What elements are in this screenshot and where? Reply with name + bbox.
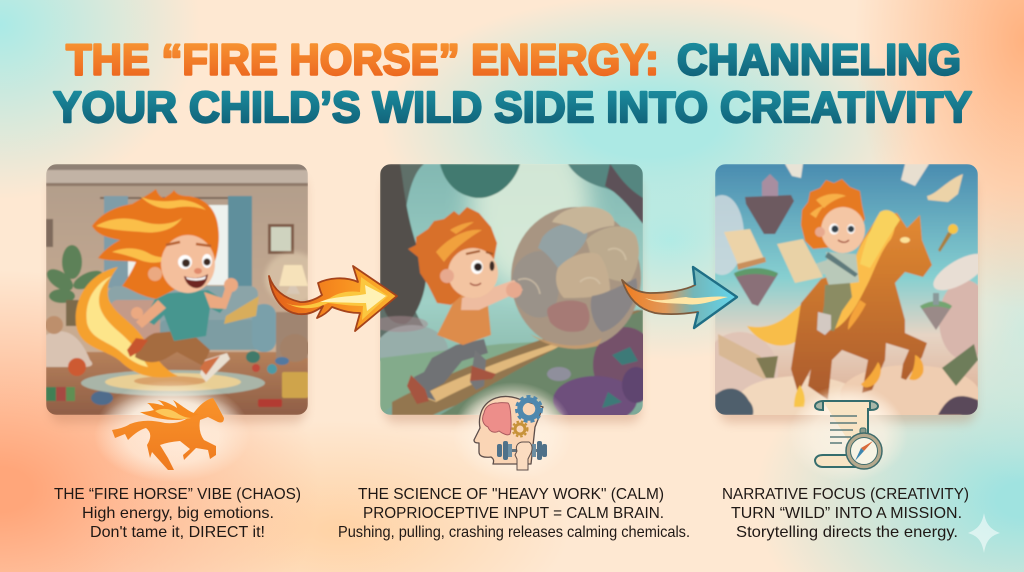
caption line: Don't tame it, DIRECT it! bbox=[90, 524, 265, 541]
caption: narrative focus bbox=[722, 486, 969, 541]
icon: galloping fire horse bbox=[112, 398, 224, 470]
rider scroll bbox=[777, 239, 823, 283]
boy arms bbox=[131, 278, 238, 328]
glow behind icons bbox=[94, 390, 908, 482]
head silhouette bbox=[474, 396, 543, 464]
toys bbox=[45, 316, 308, 407]
boy hair highlights bbox=[96, 196, 206, 263]
trees and canopy bbox=[380, 164, 643, 340]
floating islands bbox=[734, 174, 978, 386]
sky bbox=[715, 164, 978, 388]
sofa bbox=[108, 286, 310, 362]
purple rocks bbox=[546, 326, 643, 415]
icon glow on panel bbox=[101, 382, 243, 415]
lower foliage bbox=[380, 315, 533, 412]
magic spark bbox=[938, 224, 958, 252]
blue gear bbox=[516, 396, 542, 422]
clouds bbox=[715, 194, 978, 415]
panel shadows bbox=[50, 176, 976, 423]
caption line: High energy, big emotions. bbox=[82, 505, 274, 522]
rider body bbox=[816, 252, 860, 336]
panel: narrative focus creativity illustration bbox=[715, 164, 978, 415]
caption heading: THE SCIENCE OF "HEAVY WORK" (CALM) bbox=[358, 486, 664, 503]
sloped ground path bbox=[392, 310, 643, 415]
forest background bbox=[383, 164, 643, 415]
icon: scroll and compass bbox=[815, 401, 882, 469]
caption line: PROPRIOCEPTIVE INPUT = CALM BRAIN. bbox=[363, 505, 664, 522]
arrow: calm to creativity bbox=[622, 267, 737, 328]
icon glow on panel bbox=[802, 387, 896, 415]
scrolls bbox=[718, 164, 963, 379]
room walls and floor bbox=[46, 164, 308, 415]
boy teal shirt bbox=[144, 290, 228, 341]
title bbox=[53, 36, 972, 132]
dumbbell and hand bbox=[497, 441, 547, 470]
large boulder bbox=[511, 207, 641, 349]
title line 2: YOUR CHILD’S WILD SIDE INTO CREATIVITY bbox=[53, 84, 972, 132]
gold gear bbox=[512, 422, 528, 436]
icon glow on panel bbox=[459, 384, 568, 415]
sparkle bbox=[968, 513, 1000, 553]
panel: fire horse vibe chaos illustration bbox=[46, 164, 308, 415]
fire horse bbox=[791, 210, 932, 407]
plant bbox=[43, 245, 105, 326]
horse tail flame bbox=[746, 304, 802, 346]
arrow: flame to calm bbox=[269, 266, 397, 331]
boy body pushing bbox=[407, 280, 523, 404]
boy head and hair bbox=[408, 207, 498, 305]
caption heading: NARRATIVE FOCUS (CREATIVITY) bbox=[722, 486, 969, 503]
boy hair back flames bbox=[92, 189, 219, 299]
caption: science of heavy work bbox=[338, 486, 690, 541]
rug bbox=[81, 370, 265, 396]
caption line: Pushing, pulling, crashing releases calming chemicals. bbox=[338, 524, 690, 541]
caption line: Storytelling directs the energy. bbox=[736, 524, 958, 541]
caption: fire horse vibe bbox=[54, 486, 301, 541]
icon: brain gears dumbbell bbox=[474, 396, 547, 470]
title line 1 teal part: CHANNELING bbox=[677, 36, 961, 84]
boy face bbox=[148, 235, 215, 293]
boy legs and shoes bbox=[127, 330, 230, 382]
brain bbox=[483, 403, 511, 435]
lamp bbox=[264, 250, 308, 301]
caption heading: THE “FIRE HORSE” VIBE (CHAOS) bbox=[54, 486, 301, 503]
window and curtains bbox=[100, 196, 252, 288]
flame swirl behind boy bbox=[76, 267, 178, 378]
picture frame bbox=[46, 219, 294, 254]
panel: heavy work calm illustration bbox=[380, 164, 643, 415]
caption line: TURN “WILD” INTO A MISSION. bbox=[731, 505, 962, 522]
title line 1 orange part: THE “FIRE HORSE” ENERGY: bbox=[66, 36, 659, 84]
rider head and hair bbox=[801, 179, 865, 253]
